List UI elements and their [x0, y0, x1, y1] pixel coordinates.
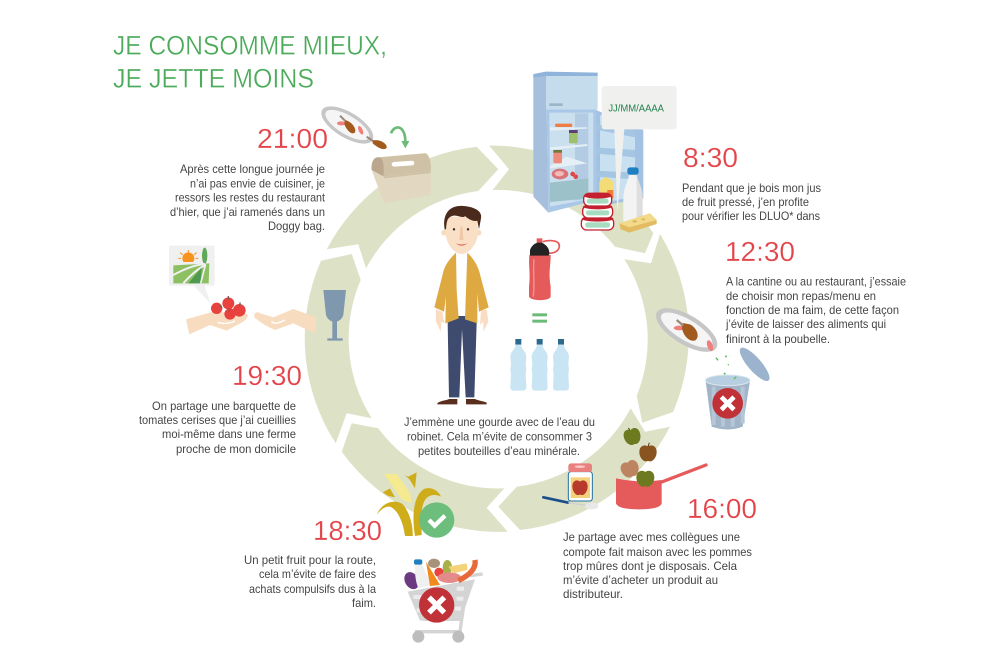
text: 12:30 step: [725, 236, 906, 346]
text: 12:30 step: j’évite de laisser des aliments qui: [725, 318, 886, 331]
text: 19:30 step: tomates cerises que j’ai cueillies: [139, 414, 296, 427]
icon: fridge with date label and food: [533, 72, 677, 233]
speech bubble with date: [602, 86, 677, 214]
title: JE JETTE MOINS: [113, 64, 314, 94]
icon: jar, spoon, pot and apples: [543, 427, 706, 509]
icon: equals sign: [532, 313, 547, 323]
text: 12:30 step: fonction de ma faim, de cette façon: [726, 304, 899, 317]
text: 18:30 step: achats compulsifs dus à la: [249, 583, 377, 596]
text: 19:30 step: 19:30: [232, 360, 302, 391]
text: 18:30 step: Un petit fruit pour la route,: [244, 554, 376, 567]
text: centre water flask caption: [404, 416, 595, 458]
text: 21:00 step: ressors les restes du restaurant: [175, 192, 326, 204]
text: 19:30 step: proche de mon domicile: [176, 443, 296, 456]
text: 8:30 step: pour vérifier les DLUO* dans: [682, 210, 820, 223]
title: JE CONSOMME MIEUX,: [113, 31, 387, 61]
icon: three water bottles: [510, 339, 569, 391]
icon: man: [434, 206, 569, 404]
text: 19:30 step: [139, 360, 302, 456]
text: 19:30 step: moi-même dans une ferme: [162, 428, 296, 441]
text: centre water flask caption: petites bouteilles d’eau minérale.: [418, 445, 580, 458]
text: 12:30 step: de choisir mon repas/menu en: [726, 290, 876, 303]
text: 19:30 step: On partage une barquette de: [152, 400, 296, 413]
text: 8:30 step: de fruit pressé, j’en profite: [682, 196, 809, 209]
text: 16:00 step: trop mûres dont je disposais. Cela: [563, 560, 738, 573]
text: 21:00 step: [170, 123, 328, 233]
text: 16:00 step: Je partage avec mes collègues une: [563, 531, 740, 544]
title: [113, 31, 387, 94]
text: 12:30 step: A la cantine ou au restaurant, j’essaie: [726, 276, 906, 288]
text: 12:30 step: 12:30: [725, 236, 795, 267]
text: 21:00 step: n’ai pas envie de cuisiner, je: [190, 178, 325, 190]
icon: banana peel and shopping cart: [377, 472, 483, 643]
text: 21:00 step: 21:00: [257, 123, 328, 154]
speech bubble with date: JJ/MM/AAAA: [608, 104, 664, 115]
icon: red water flask: [529, 238, 559, 300]
text: 8:30 step: [682, 142, 821, 223]
text: 16:00 step: distributeur.: [563, 588, 623, 601]
text: 16:00 step: [563, 493, 757, 601]
cycle ring of arrows: [305, 145, 689, 532]
text: 16:00 step: 16:00: [687, 493, 757, 524]
text: 21:00 step: d’hier, que j’ai ramenés dans un: [170, 206, 325, 219]
text: 18:30 step: cela m’évite de faire des: [259, 568, 376, 581]
text: 8:30 step: Pendant que je bois mon jus: [682, 182, 821, 195]
text: centre water flask caption: robinet. Cela m’évite de consommer 3: [407, 430, 592, 444]
text: 18:30 step: faim.: [352, 597, 376, 610]
text: 21:00 step: Après cette longue journée je: [180, 163, 325, 176]
icon: plate, green arrow and doggy bag: [316, 99, 431, 203]
text: 8:30 step: 8:30: [683, 142, 738, 173]
icon: plate and trash can: [649, 300, 774, 429]
icon: farm card, tomatoes, hands and goblet: [169, 246, 346, 341]
text: 18:30 step: [244, 515, 382, 610]
text: 21:00 step: Doggy bag.: [268, 220, 325, 233]
text: 12:30 step: finiront à la poubelle.: [726, 333, 830, 346]
text: 16:00 step: compote fait maison avec les pommes: [563, 546, 752, 559]
text: 16:00 step: m’évite d’acheter un produit au: [563, 574, 718, 587]
text: centre water flask caption: J’emmène une gourde avec de l’eau du: [404, 416, 595, 429]
text: 18:30 step: 18:30: [313, 515, 382, 546]
